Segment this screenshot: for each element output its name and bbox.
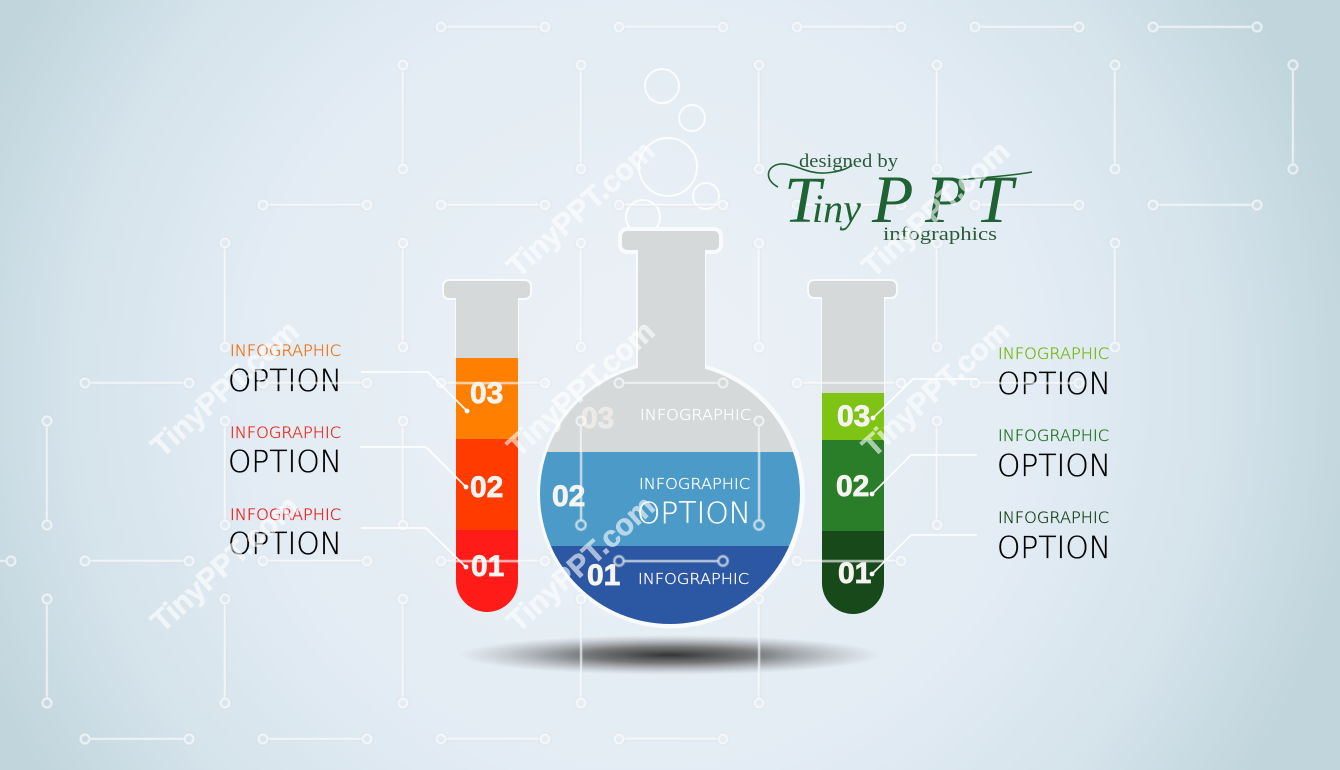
flask numbers: 03 xyxy=(581,402,614,435)
watermarks: TinyPPT.com xyxy=(501,490,661,639)
logo: P xyxy=(924,161,967,237)
flask xyxy=(530,227,810,636)
left test tube: 02 xyxy=(470,471,503,504)
right test tube: 02 xyxy=(836,470,869,503)
left options: OPTION xyxy=(228,445,342,480)
watermarks: TinyPPT.com xyxy=(856,315,1016,464)
left options xyxy=(228,341,342,562)
right options xyxy=(997,344,1111,566)
left test tube xyxy=(442,279,532,614)
logo: iny xyxy=(812,186,871,231)
flask numbers: 01 xyxy=(587,559,620,592)
logo: T xyxy=(975,161,1017,237)
watermarks: TinyPPT.com xyxy=(856,135,1016,284)
left test tube: 03 xyxy=(470,377,503,410)
watermarks: TinyPPT.com xyxy=(501,315,661,464)
flask numbers: 02 xyxy=(552,480,585,513)
watermarks xyxy=(145,135,1016,639)
watermarks: TinyPPT.com xyxy=(145,315,305,464)
logo: P xyxy=(871,161,914,237)
flask label 01: INFOGRAPHIC xyxy=(638,570,749,588)
left options: OPTION xyxy=(228,364,342,399)
right options: OPTION xyxy=(997,449,1111,484)
flask numbers xyxy=(552,402,620,592)
right options: INFOGRAPHIC xyxy=(998,508,1109,527)
left options: INFOGRAPHIC xyxy=(230,341,341,360)
right options: INFOGRAPHIC xyxy=(998,344,1109,363)
flask shadow xyxy=(458,635,882,675)
right options: INFOGRAPHIC xyxy=(998,426,1109,445)
logo: T xyxy=(784,164,825,237)
right test tube: 01 xyxy=(838,557,871,590)
leader lines xyxy=(360,372,977,576)
logo xyxy=(768,152,1032,245)
right options: OPTION xyxy=(997,531,1111,566)
right test tube xyxy=(807,279,898,615)
left options: INFOGRAPHIC xyxy=(230,505,341,524)
logo: designed by xyxy=(799,152,899,172)
flask label 02: INFOGRAPHIC xyxy=(639,475,750,493)
right options: OPTION xyxy=(997,367,1111,402)
left options: INFOGRAPHIC xyxy=(230,423,341,442)
watermarks: TinyPPT.com xyxy=(501,135,661,284)
bubbles xyxy=(626,69,719,234)
left options: OPTION xyxy=(228,527,342,562)
flask label 03: INFOGRAPHIC xyxy=(640,406,751,424)
flask label 02 xyxy=(637,475,751,530)
logo: infographics xyxy=(883,225,997,245)
left test tube: 01 xyxy=(471,550,504,583)
watermarks: TinyPPT.com xyxy=(145,490,305,639)
flask label 02: OPTION xyxy=(637,496,751,530)
right test tube: 03 xyxy=(837,400,870,433)
